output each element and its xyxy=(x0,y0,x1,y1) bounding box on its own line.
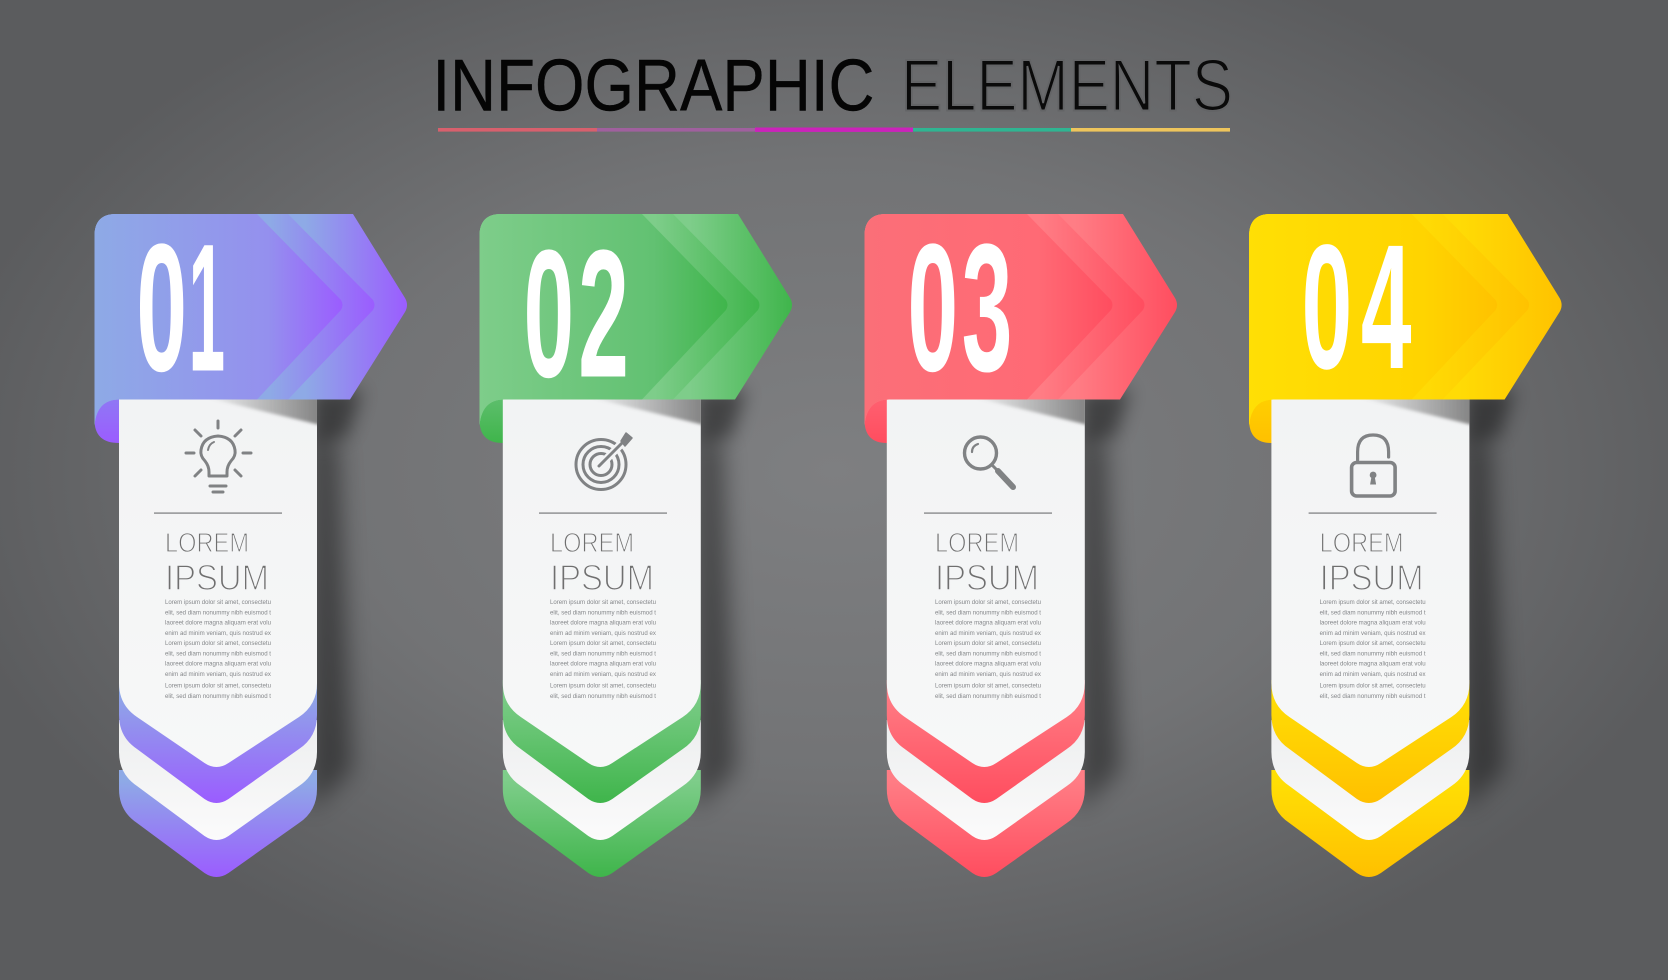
divider xyxy=(924,512,1052,514)
body text: elit, sed diam nonummy nibh euismod t xyxy=(1320,650,1426,657)
body text: enim ad minim veniam, quis nostrud ex xyxy=(550,630,657,637)
heading: LOREM xyxy=(1320,527,1404,558)
heading xyxy=(1320,527,1424,598)
body text: Lorem ipsum dolor sit amet, consectetu xyxy=(1320,640,1426,647)
fold shadow on card xyxy=(986,400,1085,426)
body text: enim ad minim veniam, quis nostrud ex xyxy=(1320,671,1426,678)
body text: Lorem ipsum dolor sit amet, consectetu xyxy=(165,599,271,606)
bottom chevron stack xyxy=(503,680,701,877)
body text: elit, sed diam nonummy nibh euismod t xyxy=(935,650,1041,657)
body text: laoreet dolore magna aliquam erat volu xyxy=(550,620,656,627)
heading: IPSUM xyxy=(935,557,1039,598)
icon: magnifying glass xyxy=(964,437,1013,487)
body text: Lorem ipsum dolor sit amet, consectetu xyxy=(550,599,656,606)
fold shadow on card xyxy=(218,400,317,426)
white card xyxy=(1271,399,1469,767)
body text: Lorem ipsum dolor sit amet, consectetu xyxy=(1320,683,1426,690)
body text: laoreet dolore magna aliquam erat volu xyxy=(1320,620,1426,627)
bottom chevron stack xyxy=(887,680,1085,877)
heading xyxy=(550,527,654,598)
body text: Lorem ipsum dolor sit amet, consectetu xyxy=(550,640,656,647)
body text: elit, sed diam nonummy nibh euismod t xyxy=(165,650,271,657)
body text: elit, sed diam nonummy nibh euismod t xyxy=(165,693,271,700)
body text: enim ad minim veniam, quis nostrud ex xyxy=(935,630,1042,637)
body text: Lorem ipsum dolor sit amet, consectetu xyxy=(935,640,1041,647)
body text: laoreet dolore magna aliquam erat volu xyxy=(1320,661,1426,668)
panel shadow xyxy=(1463,390,1515,810)
heading: IPSUM xyxy=(550,557,654,598)
title underline: five colour segments xyxy=(438,128,1230,132)
body text: elit, sed diam nonummy nibh euismod t xyxy=(1320,609,1426,616)
body text: elit, sed diam nonummy nibh euismod t xyxy=(165,609,271,616)
number banner xyxy=(864,214,1177,425)
body text xyxy=(165,599,272,700)
number banner xyxy=(480,214,792,425)
fold shadow on card xyxy=(1370,400,1470,426)
body text xyxy=(935,599,1042,700)
body text: Lorem ipsum dolor sit amet, consectetu xyxy=(935,599,1041,606)
panel shadow xyxy=(694,390,746,810)
title xyxy=(432,46,1233,126)
body text: elit, sed diam nonummy nibh euismod t xyxy=(550,693,656,700)
divider xyxy=(1309,512,1437,514)
number 01: 0 xyxy=(136,207,187,410)
panel: step 01 xyxy=(94,206,407,877)
body text: elit, sed diam nonummy nibh euismod t xyxy=(550,650,656,657)
body text: elit, sed diam nonummy nibh euismod t xyxy=(550,609,656,616)
curled ribbon end xyxy=(94,399,119,443)
body text: elit, sed diam nonummy nibh euismod t xyxy=(935,609,1041,616)
title: INFOGRAPHIC xyxy=(432,46,874,126)
heading: LOREM xyxy=(550,527,634,558)
fold shadow on card xyxy=(602,400,701,426)
heading: LOREM xyxy=(165,527,249,558)
number 04: 04 xyxy=(1302,207,1412,406)
body text: laoreet dolore magna aliquam erat volu xyxy=(165,661,271,668)
curled ribbon end xyxy=(864,399,887,443)
number 02: 02 xyxy=(524,213,629,416)
panel: step 04 xyxy=(1249,207,1562,877)
panel: step 03 xyxy=(864,207,1177,877)
white card xyxy=(119,399,317,767)
body text: laoreet dolore magna aliquam erat volu xyxy=(550,661,656,668)
icon: target with dart xyxy=(576,433,632,490)
body text xyxy=(1320,599,1426,700)
body text: Lorem ipsum dolor sit amet, consectetu xyxy=(550,683,656,690)
title: ELEMENTS xyxy=(901,46,1233,126)
body text: laoreet dolore magna aliquam erat volu xyxy=(935,620,1041,627)
body text: elit, sed diam nonummy nibh euismod t xyxy=(1320,693,1426,700)
body text: elit, sed diam nonummy nibh euismod t xyxy=(935,693,1041,700)
number banner xyxy=(1249,214,1562,425)
number 01: 1 xyxy=(189,206,225,409)
heading xyxy=(165,527,269,598)
panel shadow xyxy=(310,390,362,810)
body text: Lorem ipsum dolor sit amet, consectetu xyxy=(165,640,271,647)
divider xyxy=(539,512,667,514)
bottom chevron stack xyxy=(1271,680,1469,877)
body text: Lorem ipsum dolor sit amet, consectetu xyxy=(1320,599,1426,606)
body text: enim ad minim veniam, quis nostrud ex xyxy=(935,671,1042,678)
curled ribbon end xyxy=(1249,399,1272,443)
body text: enim ad minim veniam, quis nostrud ex xyxy=(165,671,272,678)
panel shadow xyxy=(1078,390,1130,810)
body text: laoreet dolore magna aliquam erat volu xyxy=(935,661,1041,668)
icon: light bulb xyxy=(186,421,251,492)
number banner xyxy=(94,214,407,425)
white card xyxy=(887,399,1085,767)
curled ribbon end xyxy=(480,399,503,443)
body text: enim ad minim veniam, quis nostrud ex xyxy=(165,630,272,637)
white card xyxy=(503,399,701,767)
heading xyxy=(935,527,1039,598)
heading: IPSUM xyxy=(165,557,269,598)
heading: IPSUM xyxy=(1320,557,1424,598)
number 01 xyxy=(136,206,225,410)
icon: padlock xyxy=(1352,435,1395,496)
body text: Lorem ipsum dolor sit amet, consectetu xyxy=(935,683,1041,690)
body text xyxy=(550,599,657,700)
heading: LOREM xyxy=(935,527,1019,558)
body text: enim ad minim veniam, quis nostrud ex xyxy=(550,671,657,678)
number 03: 03 xyxy=(908,207,1012,410)
body text: enim ad minim veniam, quis nostrud ex xyxy=(1320,630,1426,637)
divider xyxy=(154,512,282,514)
body text: laoreet dolore magna aliquam erat volu xyxy=(165,620,271,627)
bottom chevron stack xyxy=(119,680,317,877)
body text: Lorem ipsum dolor sit amet, consectetu xyxy=(165,683,271,690)
panel: step 02 xyxy=(480,213,792,877)
